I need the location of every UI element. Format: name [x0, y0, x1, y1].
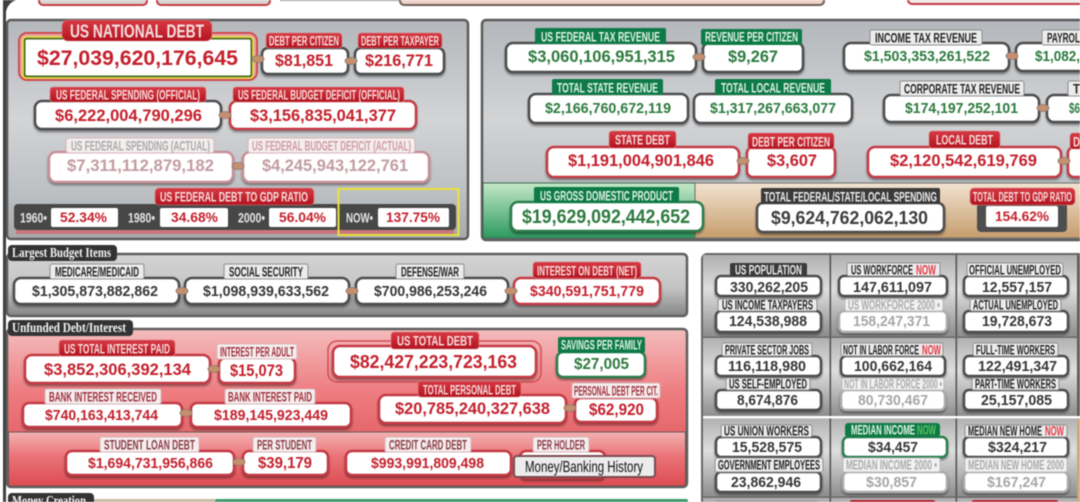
metric: median new home 2000: $167,247	[987, 474, 1046, 491]
metric: US national debt: $27,039,620,176,645	[37, 47, 238, 70]
metric: credit card debt: CREDIT CARD DEBT	[389, 438, 467, 452]
metric: US total interest paid: $3,852,306,392,134	[44, 360, 192, 379]
metric: local debt per citizen (cropped)	[1068, 133, 1080, 177]
debt to GDP ratio strip: 2000•	[238, 210, 265, 226]
panel: US national debt	[7, 20, 468, 239]
metric: US national debt: US NATIONAL DEBT	[70, 22, 204, 42]
panel: population and labor statistics	[702, 254, 1080, 502]
metric: state debt per citizen: $3,607	[767, 151, 817, 170]
metric: credit card debt: $993,991,809,498	[371, 455, 484, 472]
metric: savings per family: SAVINGS PER FAMILY	[561, 338, 642, 352]
metric: federal tax revenue: $3,060,106,951,315	[528, 47, 675, 66]
metric: per student: PER STUDENT	[257, 438, 312, 452]
metric: corporate tax revenue	[884, 81, 1039, 122]
debt to GDP ratio strip: 34.68%	[171, 209, 219, 225]
panel background	[7, 20, 468, 239]
GDP band	[483, 183, 695, 238]
metric: social security: SOCIAL SECURITY	[229, 264, 303, 280]
metric: gross domestic product: $19,629,092,442,652	[522, 207, 690, 228]
metric: official unemployed	[964, 262, 1068, 296]
metric: median income 2000	[843, 458, 947, 492]
metric: savings per family: $27,005	[574, 356, 629, 373]
metric: US population	[716, 262, 821, 296]
metric: social security	[185, 264, 349, 304]
metric: total federal/state/local spending	[757, 188, 944, 232]
metric: federal budget deficit official: $3,156,835,041,377	[250, 106, 396, 125]
button: money/banking history	[514, 456, 655, 477]
metric: state debt: $1,191,004,901,846	[568, 151, 714, 170]
metric: median income now: $34,457	[868, 439, 918, 456]
debt to GDP ratio strip: 1980•	[128, 210, 155, 226]
metric: median income now	[843, 422, 947, 457]
metric: not in labor force 2000: NOT IN LABOR FORCE 2000 •	[844, 376, 942, 392]
metric: state debt per citizen	[747, 133, 835, 177]
metric: federal spending actual	[49, 138, 233, 182]
metric: US workforce 2000: US WORKFORCE 2000 •	[848, 298, 940, 312]
metric: state debt: STATE DEBT	[615, 132, 670, 148]
metric: payroll tax revenue (cropped)	[1016, 30, 1080, 71]
metric: US self-employed	[716, 376, 821, 410]
metric: local debt	[868, 131, 1061, 177]
metric: social security: $1,098,939,633,562	[203, 283, 329, 300]
metric: cropped tax revenue	[1047, 81, 1080, 122]
metric: total state revenue: $2,166,760,672,119	[545, 100, 671, 117]
section tab: Unfunded Debt/Interest	[12, 321, 126, 336]
panel background	[702, 254, 1080, 502]
metric: US union workers	[716, 424, 821, 457]
metric: median new home 2000	[964, 458, 1068, 492]
metric: median new home now: $324,217	[988, 439, 1047, 456]
metric: student loan debt: $1,694,731,956,866	[88, 455, 213, 472]
metric: total federal/state/local spending: $9,624,762,062,130	[771, 208, 928, 228]
metric: federal budget deficit official: US FEDERAL BUDGET DEFICIT (OFFICIAL)	[238, 88, 400, 102]
metric: defense/war: DEFENSE/WAR	[401, 264, 459, 280]
metric: gross domestic product	[511, 187, 703, 231]
metric: federal spending official	[35, 87, 221, 129]
metric: debt per taxpayer: DEBT PER TAXPAYER	[361, 34, 439, 48]
metric: debt per taxpayer: $216,771	[365, 51, 433, 70]
metric: interest per adult: $15,073	[230, 361, 283, 380]
metric: actual unemployed	[964, 298, 1068, 332]
metric: interest on debt: $340,591,751,779	[530, 283, 644, 300]
metric: federal spending official: $6,222,004,790,296	[55, 106, 202, 125]
metric: US total debt	[328, 332, 541, 382]
metric: US total interest paid: US TOTAL INTEREST PAID	[64, 342, 170, 356]
connector supports	[177, 292, 516, 309]
metric: income tax revenue	[844, 30, 1009, 71]
panel background	[7, 254, 687, 316]
metric: US self-employed: 8,674,876	[737, 392, 798, 409]
metric: income tax revenue: INCOME TAX REVENUE	[875, 30, 977, 46]
top strip: cropped panels from the section above	[39, 0, 1080, 5]
debt to GDP ratio strip	[14, 188, 458, 235]
metric: part-time workers: 25,157,085	[981, 392, 1052, 409]
debt to GDP ratio strip: 52.34%	[60, 209, 108, 225]
metric: not in labor force now: NOT IN LABOR FORCE	[843, 342, 919, 358]
metric: median income now: MEDIAN INCOME	[851, 422, 915, 438]
metric: government employees	[715, 458, 823, 492]
metric: private sector jobs: 116,118,980	[728, 358, 806, 375]
metric: US national debt	[19, 20, 257, 80]
metric: bank interest received: $740,163,413,744	[45, 407, 159, 424]
metric: full-time workers	[964, 342, 1068, 376]
metric: private sector jobs: PRIVATE SECTOR JOBS	[725, 342, 809, 358]
metric: bank interest paid: BANK INTEREST PAID	[228, 390, 312, 404]
metric: US workforce 2000: 158,247,371	[853, 313, 930, 330]
metric: defense/war: $700,986,253,246	[374, 283, 487, 300]
metric: private sector jobs	[716, 342, 821, 376]
metric: total personal debt: $20,785,240,327,638	[395, 399, 550, 418]
metric: medicare/medicaid: $1,305,873,882,862	[32, 283, 158, 300]
metric: US population: 330,262,205	[730, 279, 808, 296]
metric: debt per citizen: $81,851	[275, 51, 333, 70]
metric: US workforce now: NOW	[916, 262, 936, 278]
debt to GDP ratio strip: NOW•	[346, 210, 373, 226]
metric: median income now: NOW	[917, 422, 936, 438]
metric: defense/war	[356, 264, 508, 304]
metric: total personal debt	[379, 381, 566, 423]
metric: federal budget deficit actual: $4,245,943,122,761	[262, 156, 408, 175]
metric: actual unemployed: 19,728,673	[982, 313, 1052, 330]
metric: per student: $39,179	[258, 455, 312, 472]
debt to GDP ratio strip: 56.04%	[279, 209, 327, 225]
panel: unfunded debt/interest	[7, 320, 687, 487]
section tab: Largest Budget Items	[12, 246, 111, 261]
metric: US income taxpayers: US INCOME TAXPAYERS	[722, 298, 813, 312]
metric: US income taxpayers: 124,538,988	[729, 313, 807, 330]
metric: revenue per citizen	[701, 29, 803, 72]
metric: revenue per citizen: REVENUE PER CITIZEN	[705, 30, 798, 44]
metric: revenue per citizen: $9,267	[728, 47, 778, 66]
metric: interest on debt	[514, 262, 660, 304]
metric: median income 2000: MEDIAN INCOME 2000 •	[846, 458, 937, 472]
metric: per student	[243, 437, 328, 475]
metric: state debt per citizen: DEBT PER CITIZEN	[752, 134, 830, 150]
metric: corporate tax revenue: $174,197,252,101	[905, 100, 1018, 117]
metric: US union workers: US UNION WORKERS	[724, 424, 809, 438]
metric: part-time workers	[964, 376, 1068, 410]
metric: debt per citizen: DEBT PER CITIZEN	[269, 34, 339, 48]
metric: total state revenue: TOTAL STATE REVENUE	[557, 80, 658, 96]
metric: total debt to GDP ratio	[970, 188, 1075, 232]
upper red band	[7, 329, 687, 487]
metric: federal spending actual: $7,311,112,879,182	[67, 156, 214, 175]
metric: personal debt per citizen: $62,920	[589, 400, 644, 419]
metric: bank interest received	[23, 389, 182, 427]
panel background	[482, 20, 1080, 240]
metric: not in labor force now: NOW	[922, 342, 941, 358]
panel: money creation (cropped)	[8, 493, 688, 502]
metric: gross domestic product: US GROSS DOMESTIC PRODUCT	[540, 188, 673, 204]
metric: full-time workers: 122,491,347	[978, 358, 1057, 375]
spending band	[695, 183, 1080, 238]
debt to GDP ratio strip: 1960•	[20, 210, 47, 226]
metric: total federal/state/local spending: TOTAL FEDERAL/STATE/LOCAL SPENDING	[764, 190, 937, 204]
metric: interest on debt: INTEREST ON DEBT (NET)	[537, 264, 637, 278]
metric: US total debt: US TOTAL DEBT	[397, 332, 473, 348]
metric: US population: US POPULATION	[735, 262, 802, 278]
metric: federal spending official: US FEDERAL SPENDING (OFFICIAL)	[56, 88, 200, 102]
metric: interest per adult	[217, 344, 297, 383]
metric: personal debt per citizen	[572, 383, 660, 422]
page frame: left edge line	[3, 0, 24, 502]
panel: largest budget items	[7, 245, 687, 316]
metric: official unemployed: 12,557,157	[982, 279, 1052, 296]
metric: income tax revenue: $1,503,353,261,522	[864, 48, 990, 65]
metric: medicare/medicaid	[14, 264, 179, 304]
metric: government employees: GOVERNMENT EMPLOYEES	[718, 458, 820, 472]
metric: US workforce now: US WORKFORCE	[851, 262, 913, 278]
metric: US union workers: 15,528,575	[732, 439, 802, 456]
metric: debt per citizen	[262, 33, 348, 74]
debt to GDP ratio strip: 137.75%	[386, 209, 441, 225]
metric: total debt to GDP ratio: 154.62%	[995, 208, 1050, 224]
metric: US income taxpayers	[716, 298, 821, 332]
metric: not in labor force 2000	[841, 376, 945, 410]
metric: US workforce now	[839, 262, 947, 296]
metric: not in labor force now	[841, 342, 945, 376]
metric: student loan debt	[66, 437, 234, 475]
connectors between metric boxes	[176, 52, 1070, 466]
metric: per holder	[520, 437, 605, 478]
metric: total personal debt: TOTAL PERSONAL DEBT	[423, 382, 516, 398]
metric: not in labor force 2000: 80,730,467	[858, 392, 928, 409]
metric: not in labor force now: 100,662,164	[854, 358, 933, 375]
metric: federal tax revenue: US FEDERAL TAX REVENUE	[541, 30, 660, 44]
metric: state debt	[547, 131, 739, 177]
metric: US total interest paid	[25, 340, 210, 383]
metric: US total debt: $82,427,223,723,163	[350, 352, 517, 372]
panel: unfunded debt/interest: PERSONAL DEBT PER CIT.	[574, 384, 658, 398]
metric: total local revenue: $1,317,267,663,077	[710, 100, 836, 117]
metric: bank interest paid	[191, 389, 351, 427]
button: money/banking history: Money/Banking History	[525, 459, 643, 476]
metric: local debt: $2,120,542,619,769	[890, 151, 1037, 170]
metric: federal budget deficit actual: US FEDERAL BUDGET DEFICIT (ACTUAL)	[252, 138, 411, 154]
metric: local debt: LOCAL DEBT	[936, 132, 993, 148]
metric: federal budget deficit actual	[243, 138, 429, 182]
lower red band	[8, 432, 686, 486]
metric: median income 2000: $30,857	[866, 474, 917, 491]
metric: credit card debt	[346, 437, 511, 475]
metric: student loan debt: STUDENT LOAN DEBT	[104, 438, 195, 452]
metric: US self-employed: US SELF-EMPLOYED	[729, 376, 807, 392]
metric: median new home now: NOW	[1045, 424, 1064, 438]
metric: federal budget deficit official	[230, 87, 416, 129]
metric: total state revenue	[529, 79, 688, 123]
metric: federal spending actual: US FEDERAL SPENDING (ACTUAL)	[71, 138, 210, 154]
metric: medicare/medicaid: MEDICARE/MEDICAID	[55, 264, 139, 280]
metric: savings per family	[557, 337, 645, 377]
metric: federal tax revenue	[506, 28, 696, 72]
metric: bank interest paid: $189,145,923,449	[214, 407, 328, 424]
panel: revenue and state/local debt	[482, 20, 1080, 240]
metric: total local revenue	[694, 79, 852, 123]
metric: US workforce now: 147,611,097	[853, 279, 932, 296]
metric: total local revenue: TOTAL LOCAL REVENUE	[721, 80, 825, 96]
metric: government employees: 23,862,946	[731, 474, 801, 491]
metric: bank interest received: BANK INTEREST RECEIVED	[49, 390, 157, 404]
metric: interest per adult: INTEREST PER ADULT	[220, 344, 294, 360]
metric: per holder: PER HOLDER	[537, 438, 585, 452]
cropped labels along bottom edge	[715, 500, 1058, 502]
metric: median new home now	[964, 424, 1068, 457]
metric: US workforce 2000	[839, 298, 947, 332]
debt to GDP ratio strip: US FEDERAL DEBT TO GDP RATIO	[160, 190, 308, 204]
metric: debt per taxpayer	[355, 33, 444, 74]
